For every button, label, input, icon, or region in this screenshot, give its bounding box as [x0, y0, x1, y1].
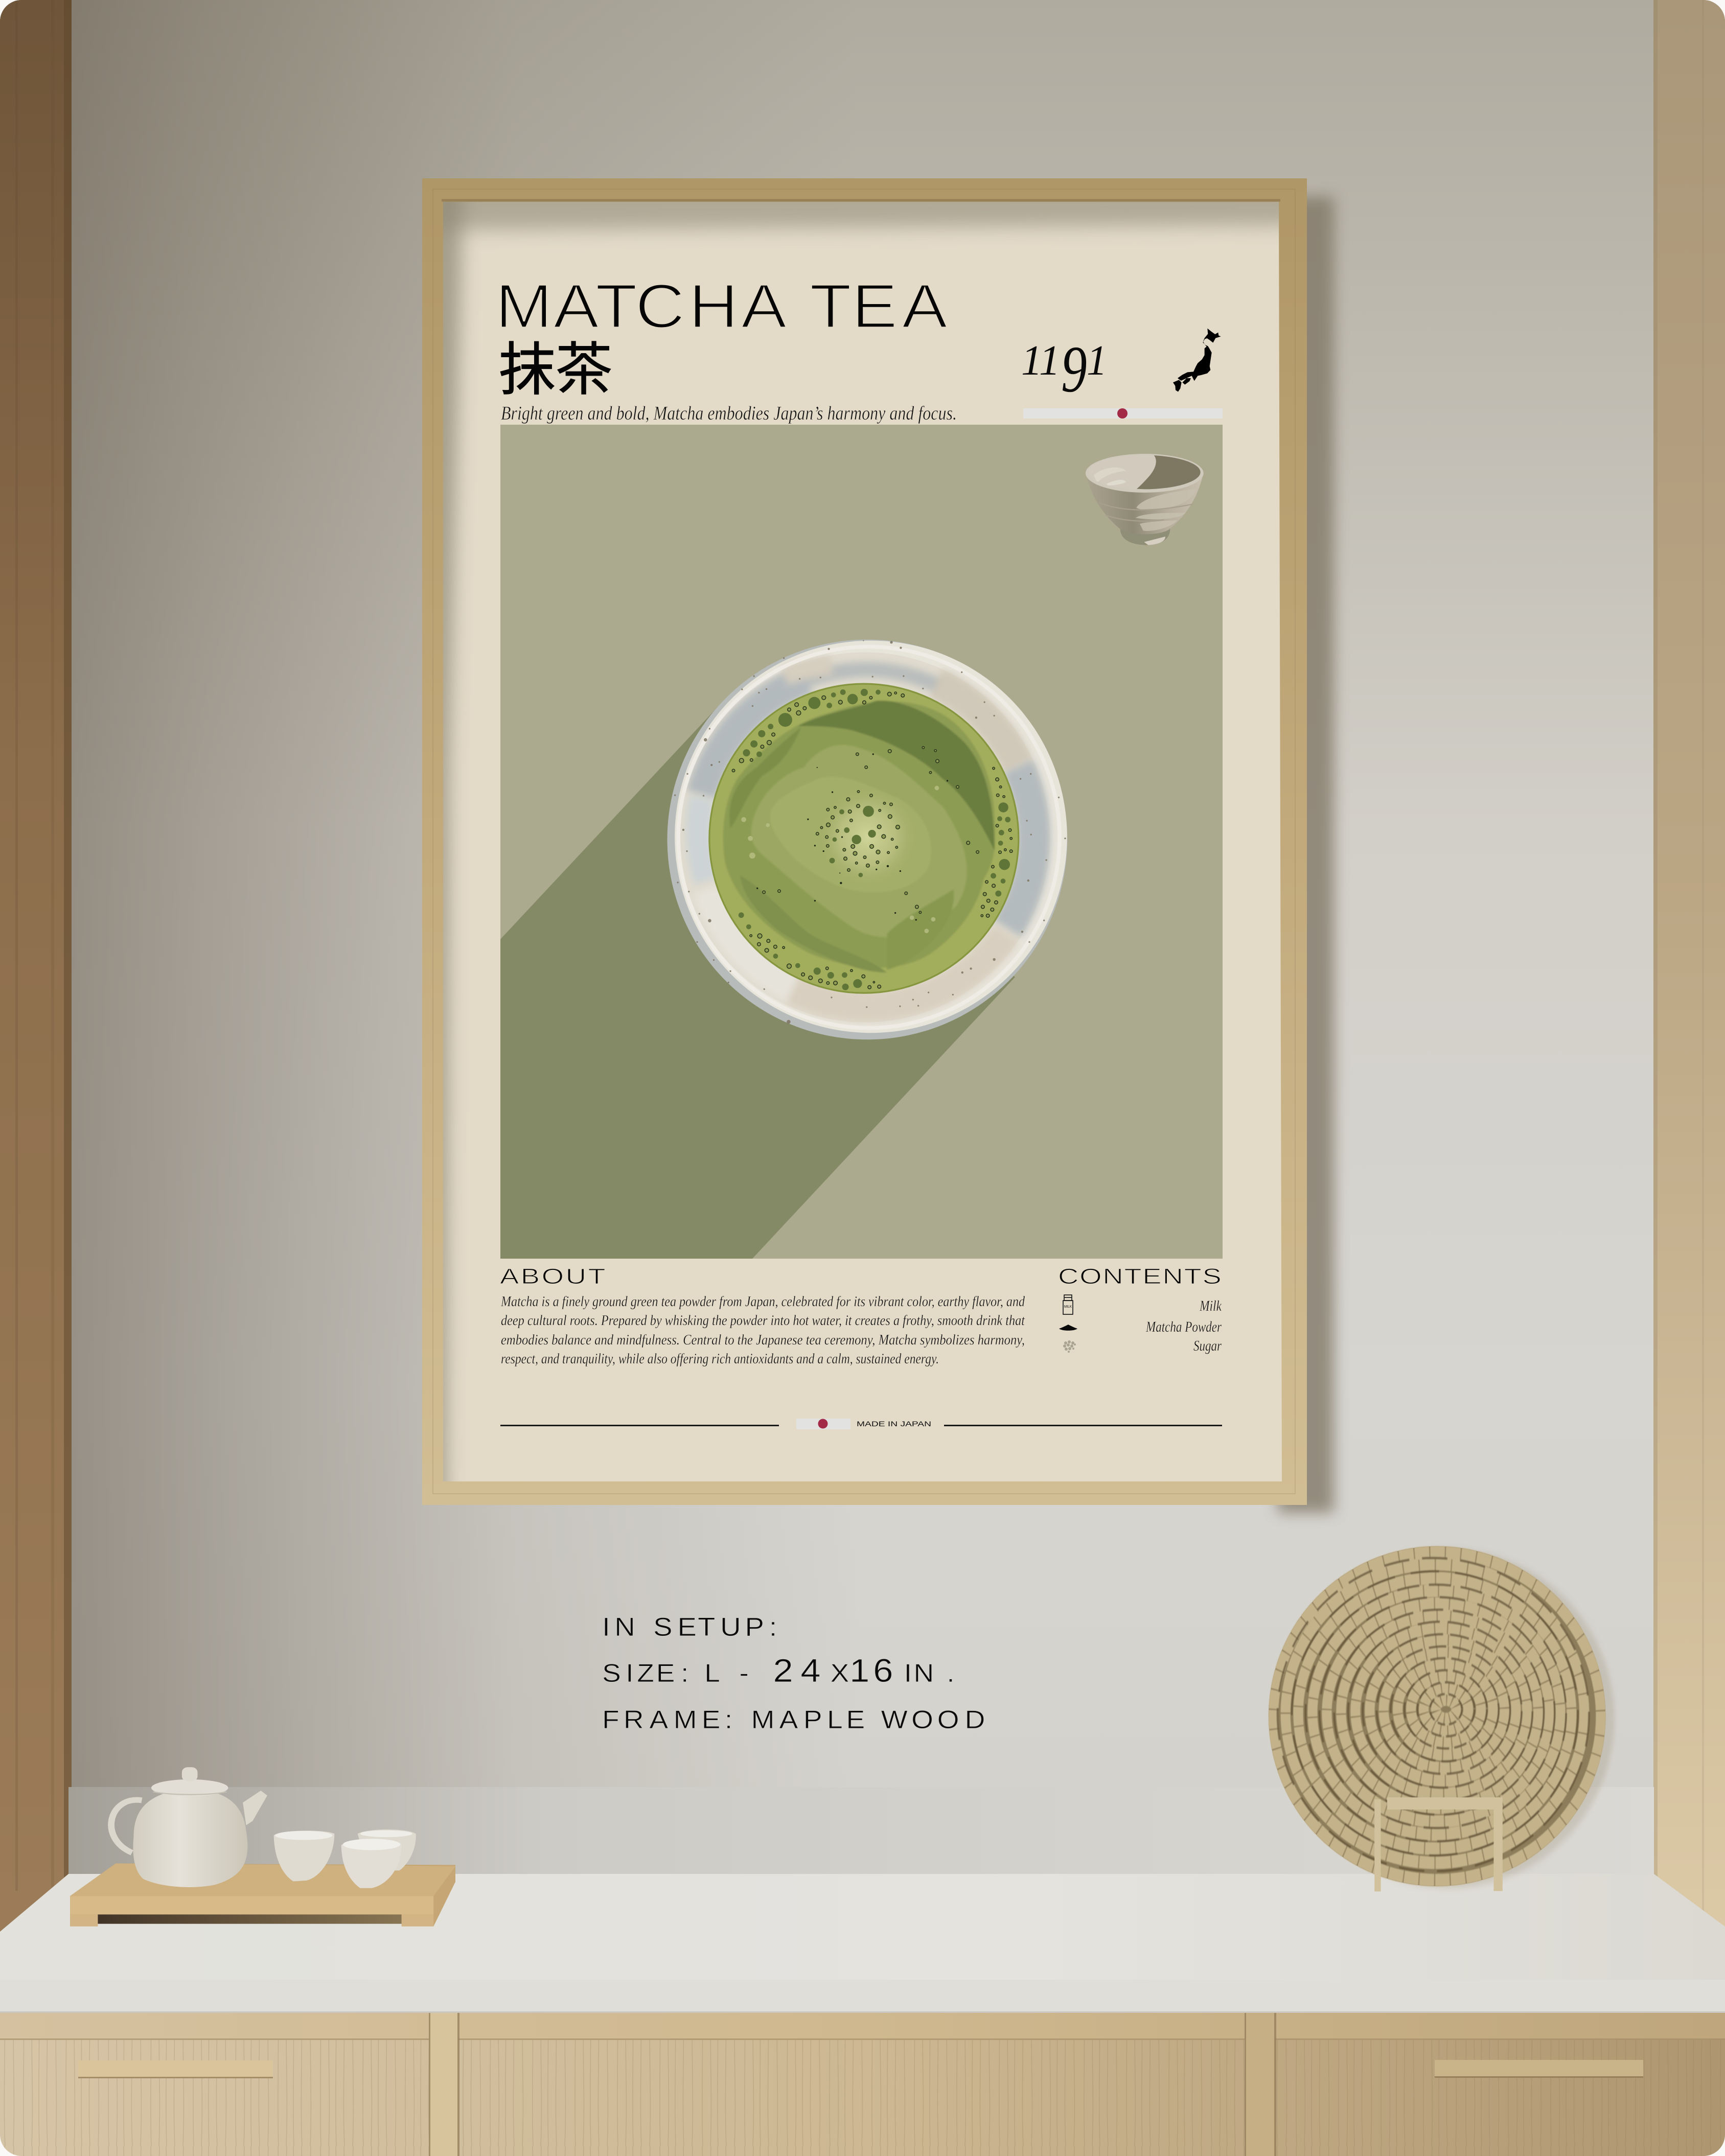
year 1191 [1021, 333, 1107, 406]
about paragraph [500, 1293, 1025, 1367]
in setup text: SIZE: [602, 1659, 688, 1687]
tea set on wooden tray [70, 1767, 455, 1927]
cabinet top rail [0, 2013, 1725, 2040]
made in japan text: MADE IN JAPAN [857, 1420, 931, 1428]
about paragraph: respect, and tranquility, while also offering rich antioxidants and a calm, sustained energy. [501, 1351, 939, 1367]
icon: sugar grains [1063, 1340, 1076, 1353]
in setup text: 24 [773, 1653, 821, 1689]
drawer handle right [1435, 2060, 1643, 2078]
year 1191: 1 [1087, 337, 1107, 384]
woven wall plate and stand [1269, 1546, 1615, 1891]
contents list: Sugar [1193, 1337, 1222, 1354]
frame drop shadow [1278, 197, 1334, 1513]
small tea bowl [1086, 451, 1205, 545]
in setup text: X [831, 1659, 849, 1687]
bowl foot [1120, 528, 1170, 545]
tea cups [274, 1829, 416, 1888]
in setup text: L [704, 1659, 720, 1687]
pale foam spots [741, 786, 939, 933]
in setup text: FRAME: MAPLE WOOD [602, 1705, 985, 1734]
subtitle: Bright green and bold, Matcha embodies Japan’s harmony and focus. [501, 403, 957, 424]
contents list: Matcha Powder [1145, 1318, 1222, 1335]
year 1191: 11 [1021, 337, 1060, 384]
cabinet [0, 2013, 1725, 2156]
countertop [0, 1874, 1725, 2013]
ceramic speckles [674, 640, 1066, 1024]
foam bubbles: dots [756, 753, 948, 921]
about paragraph: deep cultural roots. Prepared by whisking the powder into hot water, it creates a frothy, smooth drink that [501, 1312, 1025, 1329]
title: MATCHA TEA [495, 272, 948, 341]
wooden frame [422, 178, 1307, 1505]
matcha tea surface [708, 683, 1019, 994]
plate stand [1374, 1797, 1503, 1891]
woven rings [1273, 1552, 1601, 1880]
icon: map of Japan [1173, 329, 1221, 392]
in setup text: - [740, 1659, 749, 1687]
icon: matcha powder heap [1059, 1325, 1077, 1331]
flag mark [796, 1419, 850, 1429]
foam bubbles: large [739, 689, 1010, 990]
backsplash [68, 1787, 1654, 1876]
in setup text: IN. [904, 1659, 955, 1687]
teapot [111, 1767, 267, 1887]
contents heading: CONTENTS [1058, 1264, 1222, 1288]
tray [70, 1864, 455, 1927]
contents list [1145, 1297, 1222, 1354]
icon: milk bottle [1063, 1295, 1073, 1314]
about paragraph: Matcha is a finely ground green tea powder from Japan, celebrated for its vibrant color, earthy flavor, and [500, 1293, 1025, 1310]
left wooden pillar [0, 0, 72, 1937]
long shadow of bowl [500, 703, 1015, 1259]
framed poster [422, 174, 1307, 1508]
illustration panel [500, 425, 1223, 1259]
cabinet stiles [429, 2013, 458, 2156]
in setup text [602, 1612, 985, 1734]
foam bubbles: small rings [732, 692, 1013, 989]
about paragraph: embodies balance and mindfulness. Central to the Japanese tea ceremony, Matcha symbolizes harmony, [501, 1332, 1025, 1348]
right wooden pillar [1653, 0, 1725, 1937]
dark gaps between rings [1278, 1558, 1589, 1871]
year 1191: 9 [1061, 333, 1087, 406]
poster paper [424, 174, 1298, 1508]
contents list: Milk [1199, 1297, 1222, 1314]
matcha bowl from above [667, 639, 1067, 1039]
japanese title: 抹茶 [499, 338, 612, 402]
in setup text: IN SETUP: [602, 1612, 777, 1641]
about heading: ABOUT [500, 1264, 606, 1288]
icon: milk bottle: MILK [1064, 1305, 1072, 1309]
drawer handle left [78, 2060, 273, 2078]
in setup text: 16 [849, 1653, 893, 1689]
footer: made in japan [500, 1419, 1222, 1429]
locator bar with red dot [1023, 408, 1223, 419]
